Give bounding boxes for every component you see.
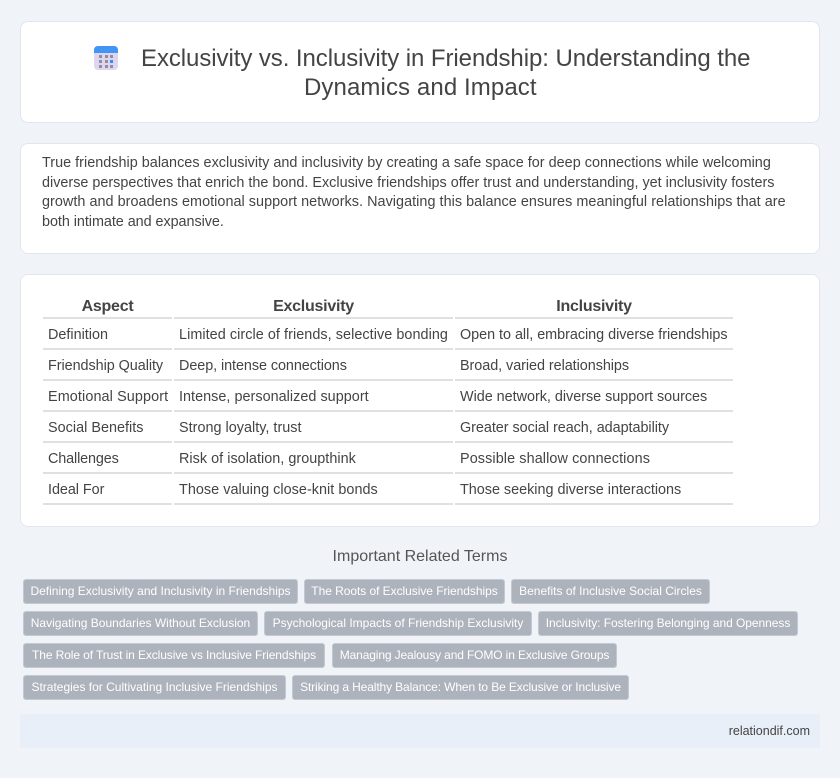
comparison table: Ideal For: [48, 482, 104, 498]
intro text: diverse perspectives that enrich the bond. Exclusive friendships offer trust and understanding, yet inclusivity fosters: [42, 174, 774, 190]
related terms tags: [23, 579, 798, 700]
comparison table: Broad, varied relationships: [460, 358, 629, 374]
tag: [23, 579, 298, 604]
tag: [538, 611, 798, 636]
related terms heading: Important Related Terms: [333, 548, 507, 565]
title: Dynamics and Impact: [304, 74, 537, 101]
header: Exclusivity: Exclusivity: [273, 298, 354, 315]
header: Aspect: Aspect: [82, 298, 133, 315]
icon: calendar: [94, 46, 118, 70]
tag: [23, 643, 325, 668]
comparison table: Intense, personalized support: [179, 389, 369, 405]
footer bar: [20, 714, 820, 748]
tag: [292, 675, 629, 700]
tag: Defining Exclusivity and Inclusivity in Friendships: [30, 584, 291, 598]
tag: [23, 675, 286, 700]
title: [141, 45, 750, 101]
header: Inclusivity: Inclusivity: [556, 298, 632, 315]
comparison table: Social Benefits: [48, 420, 144, 436]
tag: Benefits of Inclusive Social Circles: [519, 584, 702, 598]
title: Exclusivity vs. Inclusivity in Friendship: Understanding the: [141, 45, 750, 72]
comparison table: Risk of isolation, groupthink: [179, 451, 356, 467]
comparison table: Open to all, embracing diverse friendships: [460, 327, 728, 343]
intro text: growth and broadens emotional support networks. Navigating this balance ensures meaningful relationships that are: [42, 194, 786, 210]
intro text: both intimate and expansive.: [42, 214, 224, 230]
title card: [20, 21, 820, 123]
comparison table: Possible shallow connections: [460, 451, 650, 467]
tag: [332, 643, 617, 668]
comparison table: Those seeking diverse interactions: [460, 482, 681, 498]
comparison table: Those valuing close-knit bonds: [179, 482, 378, 498]
comparison table: Deep, intense connections: [179, 358, 347, 374]
comparison table: Strong loyalty, trust: [179, 420, 302, 436]
tag: The Role of Trust in Exclusive vs Inclusive Friendships: [32, 648, 316, 662]
tag: [511, 579, 710, 604]
tag: Navigating Boundaries Without Exclusion: [31, 616, 250, 630]
intro card: [20, 143, 820, 254]
comparison table: Friendship Quality: [48, 358, 163, 374]
tag: Strategies for Cultivating Inclusive Friendships: [31, 680, 278, 694]
intro text: [42, 155, 786, 230]
comparison table: Wide network, diverse support sources: [460, 389, 707, 405]
tag: [304, 579, 505, 604]
table card: [20, 274, 820, 527]
comparison table: Limited circle of friends, selective bonding: [179, 327, 448, 343]
tag: Inclusivity: Fostering Belonging and Openness: [546, 616, 790, 630]
tag: Psychological Impacts of Friendship Exclusivity: [273, 616, 523, 630]
comparison table: Greater social reach, adaptability: [460, 420, 669, 436]
comparison table: Definition: [48, 327, 108, 343]
footer text: relationdif.com: [729, 724, 810, 738]
comparison table: Emotional Support: [48, 389, 168, 405]
comparison table: [43, 298, 733, 505]
tag: Managing Jealousy and FOMO in Exclusive Groups: [340, 648, 609, 662]
tag: [264, 611, 532, 636]
intro text: True friendship balances exclusivity and inclusivity by creating a safe space for deep connections while welcoming: [42, 155, 771, 171]
tag: The Roots of Exclusive Friendships: [311, 584, 498, 598]
comparison table: Challenges: [48, 451, 119, 467]
tag: [23, 611, 258, 636]
tag: Striking a Healthy Balance: When to Be Exclusive or Inclusive: [300, 680, 621, 694]
